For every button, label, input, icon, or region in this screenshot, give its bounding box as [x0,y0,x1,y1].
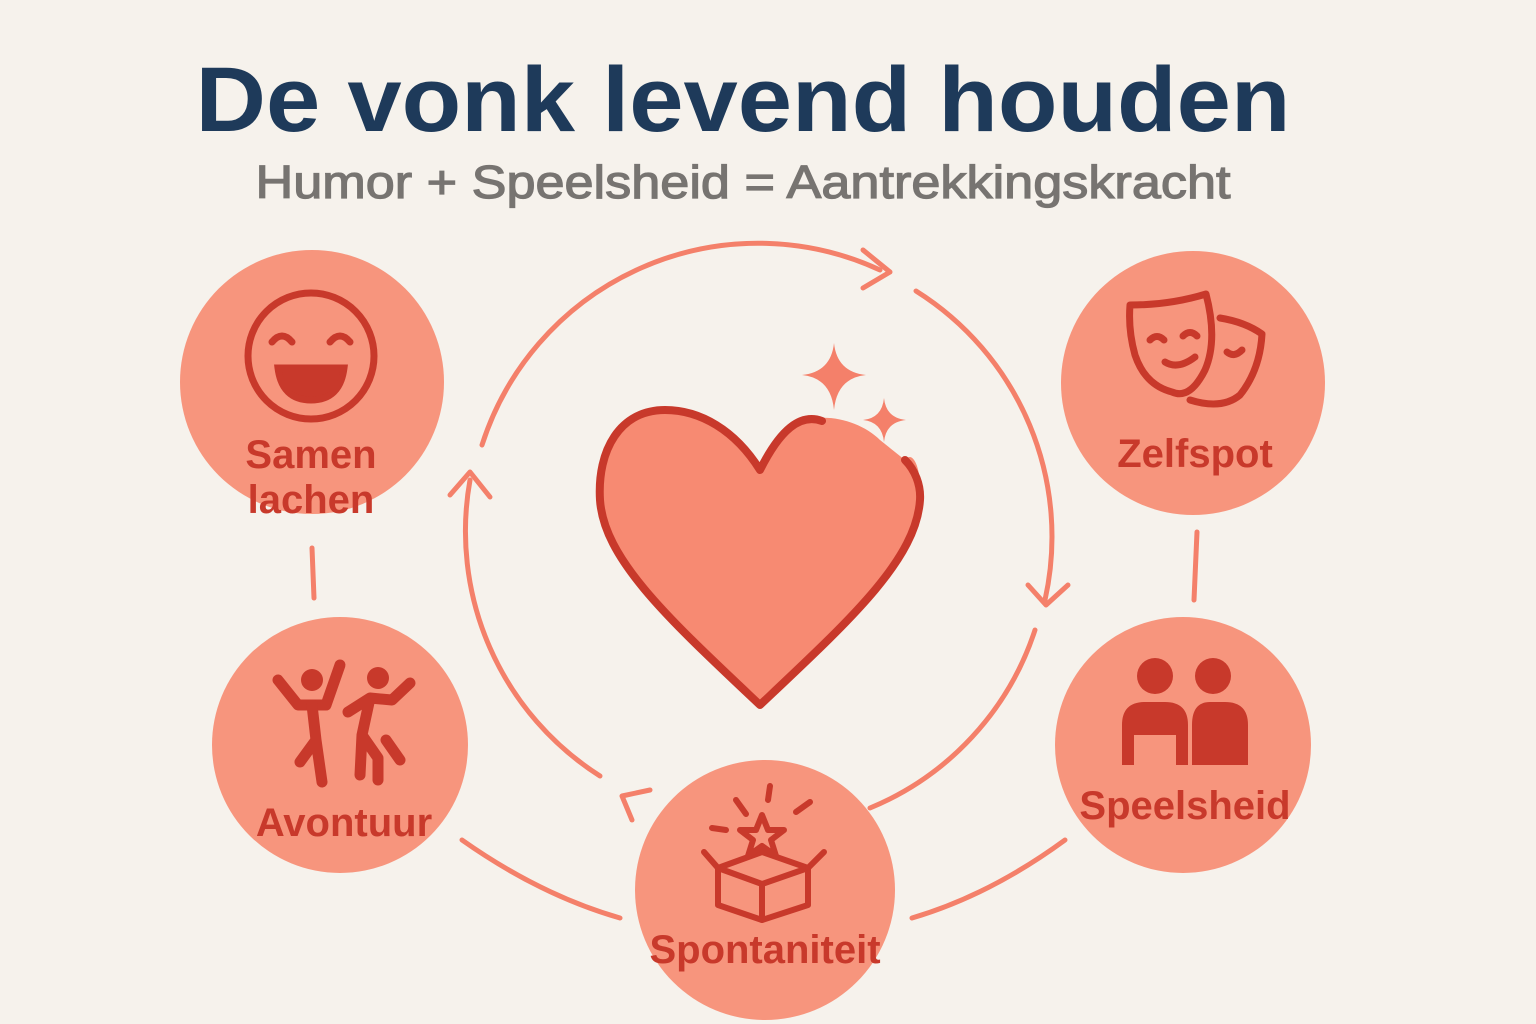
node: Avontuur [212,617,468,873]
heart with sparkles [600,343,920,705]
node: Avontuur: Avontuur [256,801,432,845]
node: Speelsheid [1055,617,1311,873]
icon: laughing face [248,293,374,419]
icon: theater masks [1130,294,1262,404]
icon: two people [1122,658,1248,765]
node: Samen lachen: lachen [248,478,374,522]
icon: dancing people [278,665,410,782]
node: Speelsheid: Speelsheid [1079,784,1291,828]
node: Zelfspot: Zelfspot [1117,432,1273,476]
node: Spontaniteit: Spontaniteit [649,928,881,972]
node: Zelfspot [1061,251,1325,515]
node: Samen lachen: Samen [245,433,377,477]
icon: gift box with star [704,786,824,920]
node: Spontaniteit [635,760,895,1020]
node: Samen lachen [180,250,444,522]
subtitle: Humor + Speelsheid = Aantrekkingskracht [256,156,1231,208]
title: De vonk levend houden [196,49,1290,151]
cycle arrows [312,243,1197,918]
